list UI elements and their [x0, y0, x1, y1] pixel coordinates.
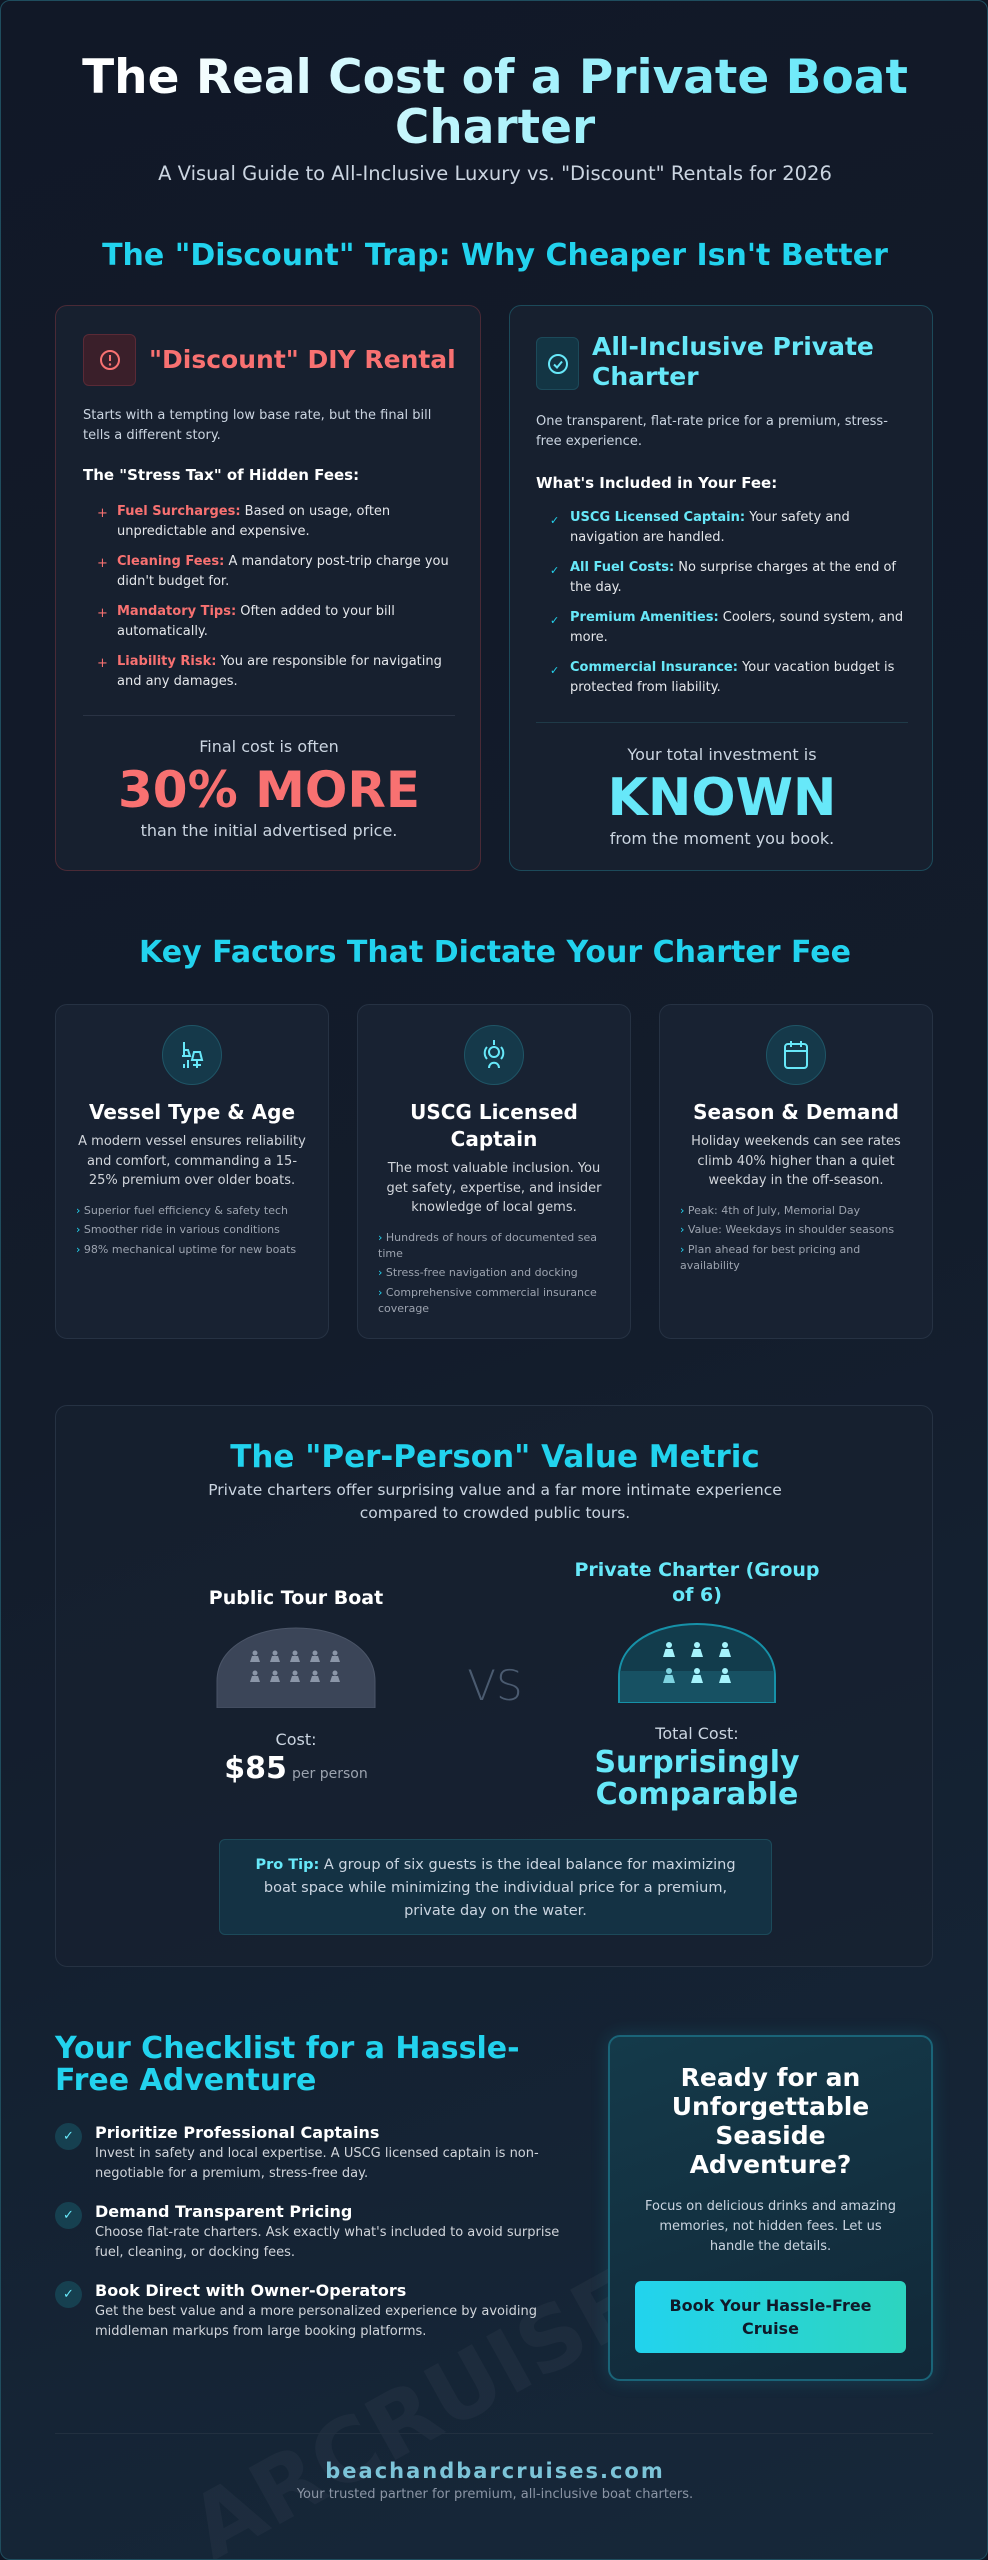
callout: pro tip: [219, 1839, 772, 1935]
subtitle: Private charters offer surprising value and a far more intimate experience compared to crowded public tours.: [208, 1481, 782, 1522]
description: One transparent, flat-rate price for a premium, stress-free experience.: [536, 414, 888, 449]
card: vessel type: 98% mechanical uptime for new boats: [84, 1242, 296, 1256]
stat: known: from the moment you book.: [610, 829, 834, 848]
checklist item 3: Book Direct with Owner-Operators: [95, 2281, 406, 2300]
card: season: [659, 1004, 933, 1339]
button: [635, 2281, 906, 2353]
panel: CTA: [608, 2035, 933, 2381]
list: hidden fees: Liability Risk: You are responsible for navigating and any damages.: [117, 654, 442, 689]
card: captain: [357, 1004, 631, 1339]
card: captain: USCG Licensed: [410, 1100, 578, 1124]
title: The Real Cost of a Private Boat: [82, 50, 908, 105]
private charter: Surprisingly: [594, 1745, 800, 1780]
footer: [297, 2459, 693, 2502]
panel: per-person value: [55, 1405, 933, 1967]
footer: beachandbarcruises.com: [325, 2459, 665, 2483]
card: season: Holiday weekends can see rates climb 40% higher than a quiet weekday in the off-season.: [691, 1134, 901, 1188]
heading: discount trap: The "Discount" Trap: Why Cheaper Isn't Better: [102, 238, 888, 273]
card: captain: Stress-free navigation and docking: [386, 1266, 578, 1279]
checklist item 3: [55, 2281, 537, 2339]
panel: discount DIY rental: [55, 305, 481, 871]
stat: 30% more: Final cost is often: [199, 737, 339, 756]
heading: checklist: Your Checklist for a Hassle-Free Adventure: [55, 2031, 520, 2098]
CTA text: Focus on delicious drinks and amazing memories, not hidden fees. Let us handle the details.: [645, 2199, 896, 2254]
checklist item 2: ✓: [63, 2208, 74, 2223]
list: hidden fees: Cleaning Fees: A mandatory post-trip charge you didn't budget for.: [117, 554, 449, 589]
list: included: Premium Amenities: Coolers, sound system, and more.: [570, 610, 903, 645]
card: vessel type: Superior fuel efficiency & safety tech: [84, 1204, 288, 1216]
list: hidden fees: Fuel Surcharges: Based on usage, often unpredictable and expensive.: [117, 504, 390, 539]
subtitle: A Visual Guide to All-Inclusive Luxury vs. "Discount" Rentals for 2026: [158, 162, 832, 185]
card: season: Peak: 4th of July, Memorial Day: [688, 1204, 860, 1216]
icon: crowded boat: [216, 1628, 376, 1708]
list: included: [552, 510, 903, 695]
private charter: [574, 1559, 820, 1812]
vs: VS: [467, 1661, 523, 1710]
list: included: Commercial Insurance: Your vacation budget is protected from liability.: [570, 660, 894, 695]
stat: 30% more: [118, 737, 420, 840]
card: season: Season & Demand: [693, 1100, 899, 1124]
callout: pro tip: Pro Tip: A group of six guests is the ideal balance for maximizing boat space while minimizing the individual price for a premium, private day on the water.: [255, 1857, 736, 1919]
stat: known: KNOWN: [608, 768, 836, 828]
checklist item 1: ✓: [63, 2129, 74, 2144]
subheading: The "Stress Tax" of Hidden Fees:: [83, 466, 359, 484]
icon: warning: [83, 334, 136, 386]
heading: key factors: Key Factors That Dictate Your Charter Fee: [139, 935, 851, 970]
list: hidden fees: [98, 504, 449, 689]
card: captain: Hundreds of hours of documented sea time: [378, 1230, 597, 1260]
CTA heading: Ready for an Unforgettable Seaside Adventure?: [672, 2063, 869, 2179]
card: vessel type: A modern vessel ensures reliability and comfort, commanding a 15-25% premium over older boats.: [78, 1134, 306, 1188]
list: included: USCG Licensed Captain: Your safety and navigation are handled.: [570, 510, 850, 545]
stat: known: Your total investment is: [627, 745, 817, 764]
icon: private boat: [618, 1623, 776, 1703]
card: season: Plan ahead for best pricing and availability: [680, 1242, 860, 1272]
checklist item 2: [55, 2202, 559, 2260]
stat: 30% more: 30% MORE: [118, 761, 420, 819]
public tour: Cost:: [276, 1730, 316, 1749]
checklist item 1: Invest in safety and local expertise. A USCG licensed captain is non-negotiable for a premium, stress-free day.: [95, 2146, 539, 2181]
card: captain: The most valuable inclusion. You get safety, expertise, and insider knowledge of local gems.: [386, 1161, 602, 1215]
private charter: Private Charter (Group of 6): [574, 1559, 820, 1606]
card: season: Value: Weekdays in shoulder seasons: [688, 1223, 894, 1236]
card heading: All-Inclusive Private Charter: [592, 332, 874, 391]
subheading: What's Included in Your Fee:: [536, 474, 777, 492]
checklist item 1: Prioritize Professional Captains: [95, 2123, 379, 2142]
checklist item 1: [55, 2123, 539, 2181]
icon: check: [536, 337, 579, 390]
private charter: Comparable: [596, 1777, 798, 1812]
panel: all-inclusive charter: [509, 305, 933, 871]
card: captain: Captain: [451, 1127, 537, 1151]
checklist item 3: ✓: [63, 2287, 74, 2302]
checklist item 2: Demand Transparent Pricing: [95, 2202, 352, 2221]
icon: captain: [464, 1025, 524, 1085]
heading: The "Per-Person" Value Metric: [230, 1439, 760, 1475]
list: included: All Fuel Costs: No surprise charges at the end of the day.: [570, 560, 896, 595]
card: vessel type: [55, 1004, 329, 1339]
footer: Your trusted partner for premium, all-inclusive boat charters.: [297, 2487, 693, 2502]
title: [1, 53, 988, 153]
card: captain: Comprehensive commercial insurance coverage: [378, 1286, 597, 1314]
card: vessel type: Smoother ride in various conditions: [84, 1223, 280, 1236]
public tour: $85 per person: [224, 1751, 368, 1786]
checklist item 3: Get the best value and a more personalized experience by avoiding middleman markups from large booking platforms.: [95, 2304, 537, 2339]
stat: known: [608, 745, 836, 848]
public tour: [209, 1587, 383, 1786]
description: Starts with a tempting low base rate, but the final bill tells a different story.: [83, 408, 431, 443]
button: Book Your Hassle-Free Cruise: [669, 2296, 872, 2338]
icon: vessel: [162, 1025, 222, 1085]
checklist item 2: Choose flat-rate charters. Ask exactly what's included to avoid surprise fuel, cleaning, or docking fees.: [95, 2225, 559, 2260]
title: Charter: [395, 100, 595, 155]
card: vessel type: Vessel Type & Age: [89, 1100, 295, 1124]
public tour: Public Tour Boat: [209, 1587, 383, 1609]
card heading: "Discount" DIY Rental: [149, 345, 456, 374]
private charter: Total Cost:: [655, 1724, 739, 1743]
list: hidden fees: Mandatory Tips: Often added to your bill automatically.: [117, 604, 395, 639]
icon: calendar: [766, 1025, 826, 1085]
stat: 30% more: than the initial advertised price.: [141, 821, 397, 840]
